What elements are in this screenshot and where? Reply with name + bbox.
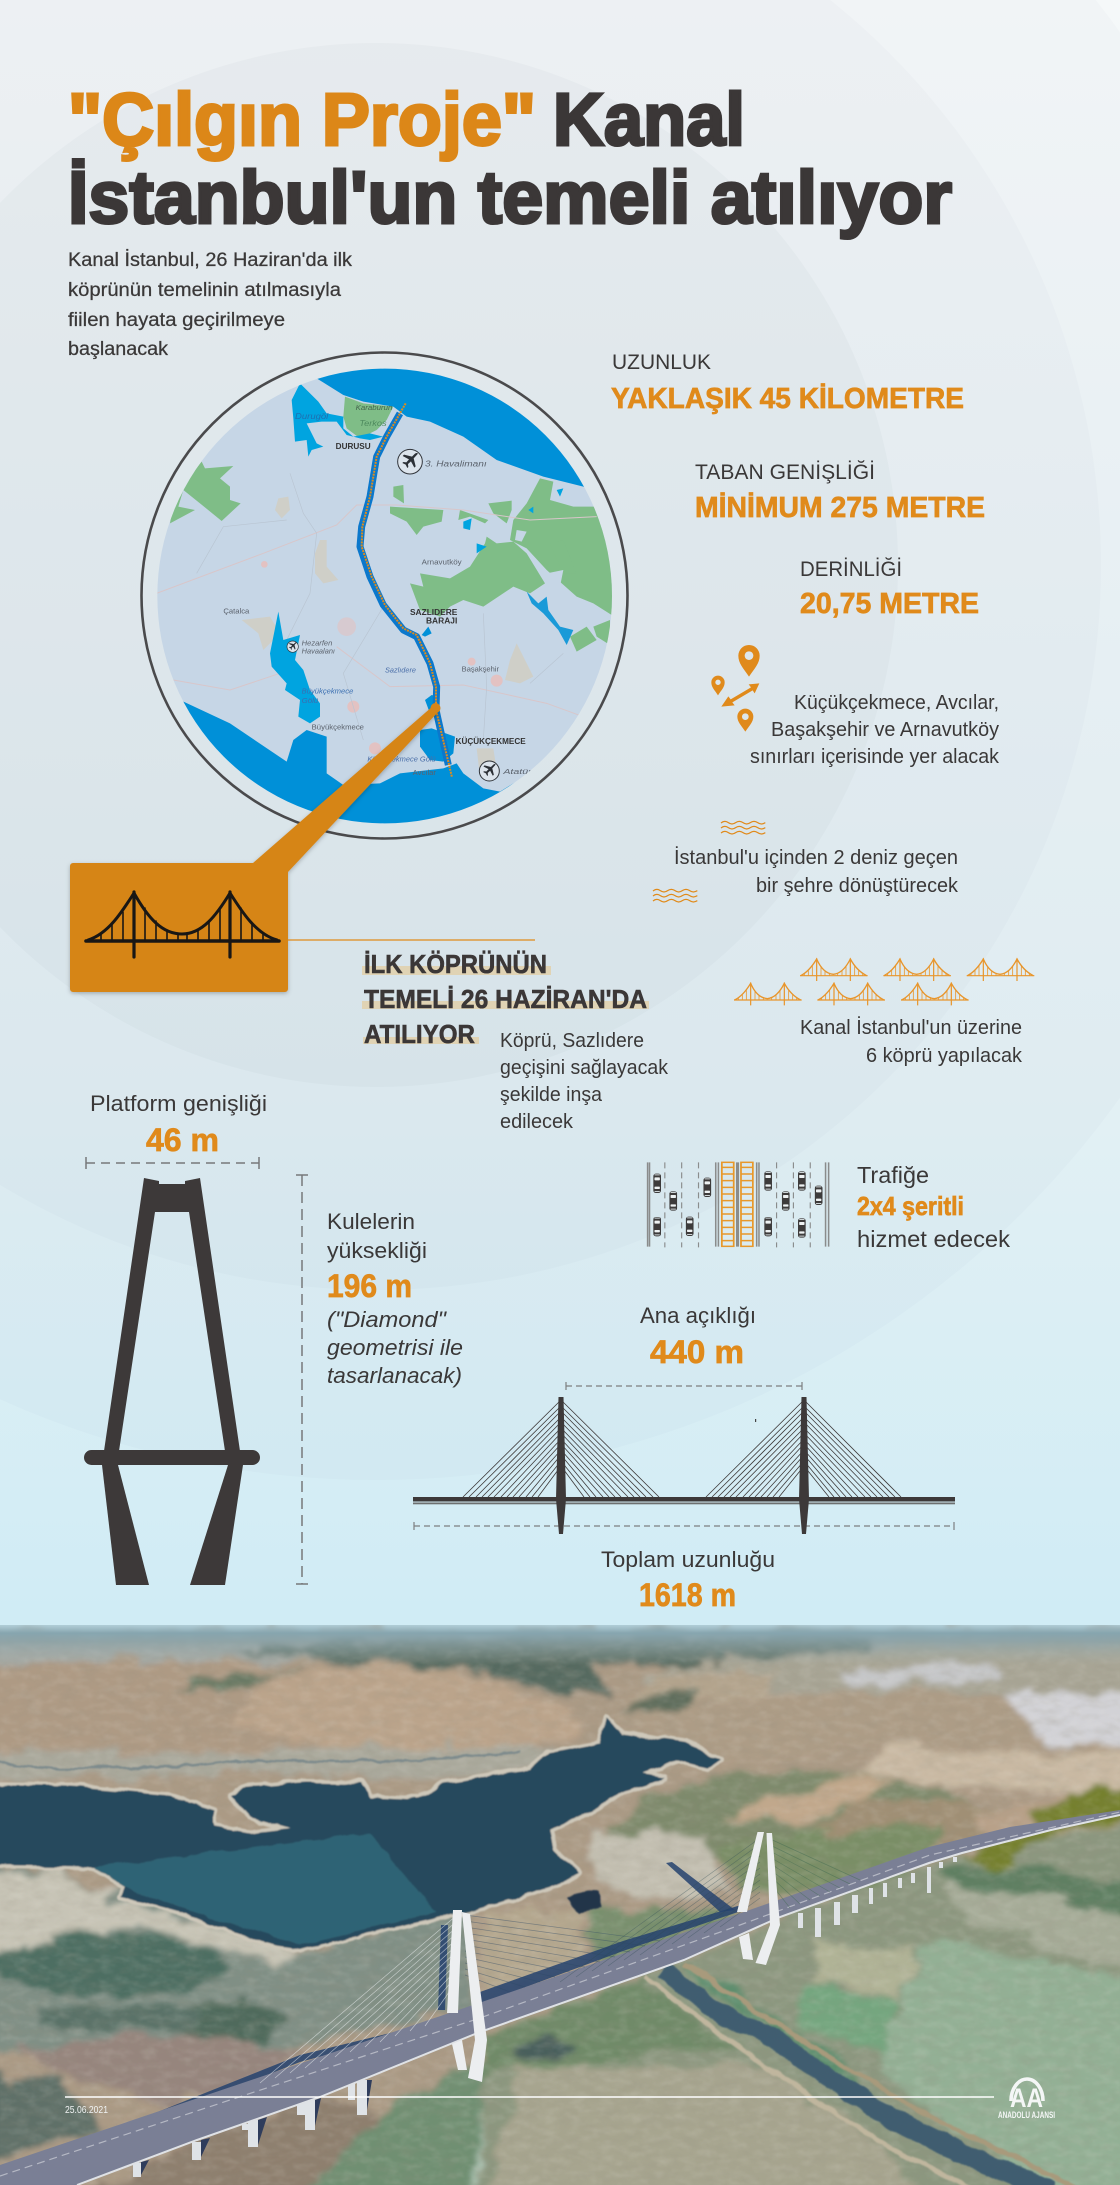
stat: length (611, 351, 964, 415)
logo: Anadolu Ajansı: AA (1010, 2083, 1043, 2113)
tower profile (84, 1178, 260, 1585)
total length label (601, 1547, 775, 1613)
intro text: Kanal İstanbul, 26 Haziran'da ilk (68, 250, 353, 271)
text: traffic lanes: 2x4 şeritli (857, 1191, 964, 1221)
map labels: Terkos (359, 418, 387, 428)
text: two seas: İstanbul'u içinden 2 deniz geçen (674, 846, 958, 869)
text: traffic lanes: Trafiğe (857, 1162, 929, 1188)
Küçükçekmece lake (420, 728, 455, 762)
stay cables (260, 1838, 860, 2083)
icon: location pins and arrow (711, 645, 760, 732)
tower height text: 196 m (327, 1268, 412, 1304)
tower height dimension (296, 1175, 308, 1584)
stat: base width: TABAN GENİŞLİĞİ (695, 461, 875, 484)
lakes (270, 383, 573, 723)
airport icons (287, 449, 499, 781)
map labels: Arnavutköy (422, 560, 462, 567)
bridge description: şekilde inşa (500, 1083, 603, 1106)
map labels: Avcılar (413, 770, 437, 777)
south sea (183, 702, 514, 824)
icon: suspension bridge (86, 892, 279, 957)
bridge deck (0, 1810, 1120, 2185)
main span label: 440 m (650, 1334, 744, 1370)
platform width label: Platform genişliği (90, 1091, 267, 1116)
icon: road with 2x4 lanes (648, 1162, 829, 1247)
heading: first bridge: İLK KÖPRÜNÜN (364, 949, 547, 979)
reservoir, river and pool (0, 1717, 1092, 2185)
canal route (360, 403, 452, 777)
stat: depth (800, 558, 979, 620)
south-east hillside (605, 1766, 968, 1861)
map circle (142, 352, 630, 840)
intro text: fiilen hayata geçirilmeye (68, 310, 285, 331)
map labels: Gölü (302, 698, 318, 705)
intro text: köprünün temelinin atılmasıyla (68, 280, 341, 301)
heading: first bridge: TEMELİ 26 HAZİRAN'DA (364, 984, 647, 1014)
text: two seas: bir şehre dönüştürecek (756, 874, 959, 897)
stat: depth: 20,75 METRE (800, 588, 979, 620)
text: two seas (674, 846, 959, 897)
title (68, 78, 952, 239)
text: six bridges: Kanal İstanbul'un üzerine (800, 1016, 1022, 1039)
tower height text: yüksekliği (327, 1238, 427, 1263)
map labels: KÜÇÜKÇEKMECE (456, 737, 526, 746)
settlement patches (242, 497, 533, 777)
icon: waves (653, 821, 765, 902)
cable-stayed bridge elevation (413, 1382, 955, 1534)
map labels: Atatür (502, 769, 533, 776)
footer line (65, 2096, 994, 2098)
lower left (0, 1860, 470, 2050)
intro text (68, 250, 353, 360)
intro text: başlanacak (68, 339, 169, 360)
text: districts: Başakşehir ve Arnavutköy (771, 718, 1000, 741)
north sea (317, 368, 584, 487)
map labels: Büyükçekmece (302, 688, 353, 695)
map labels: BARAJI (426, 617, 457, 626)
main span label: Ana açıklığı (640, 1303, 756, 1328)
map labels: Karaburun (356, 405, 392, 412)
main span label (640, 1303, 756, 1370)
connector line (288, 939, 535, 941)
bridge description (500, 1029, 669, 1133)
title: "Çılgın Proje" (68, 78, 536, 161)
bridge description: Köprü, Sazlıdere (500, 1029, 644, 1052)
pale gaps in the eastern forest (515, 530, 564, 582)
bridge description: edilecek (500, 1110, 574, 1133)
text: traffic lanes (857, 1162, 1011, 1252)
map labels: Küçükçekmece Gölü (367, 757, 436, 764)
map of Kanal İstanbul route (157, 368, 612, 824)
text: districts: Küçükçekmece, Avcılar, (794, 691, 999, 714)
tower height text: tasarlanacak) (327, 1363, 462, 1388)
bridge piers (133, 1857, 957, 2177)
platform width label (86, 1091, 267, 1169)
text: traffic lanes: hizmet edecek (857, 1226, 1011, 1252)
map labels: Sazlıdere (385, 668, 416, 675)
map labels: Başakşehir (462, 667, 500, 674)
stat: length: YAKLAŞIK 45 KİLOMETRE (611, 383, 964, 415)
text: districts (750, 691, 1000, 768)
below the deck, right (480, 1815, 1120, 2185)
stat: base width (695, 461, 985, 524)
stat: length: UZUNLUK (612, 351, 711, 374)
orange callout with bridge icon (70, 703, 440, 992)
map labels: SAZLIDERE (410, 608, 458, 617)
logo: Anadolu Ajansı (998, 2079, 1055, 2121)
terrain (0, 1630, 1120, 2185)
aerial photo of the bridge (0, 1610, 1120, 2185)
horizon haze (0, 1625, 1120, 1662)
heading: first bridge: ATILIYOR (364, 1019, 475, 1049)
map labels: Büyükçekmece (312, 724, 364, 731)
map labels (223, 405, 533, 777)
date: 25.06.2021 (65, 2105, 108, 2116)
land texture (8, 1660, 1119, 2060)
text: six bridges: 6 köprü yapılacak (866, 1044, 1023, 1067)
heading: first bridge (362, 949, 649, 1049)
icon: six bridges (734, 958, 1034, 1005)
total length label: 1618 m (639, 1577, 736, 1613)
roads (157, 505, 597, 717)
tower height text: geometrisi ile (327, 1335, 463, 1360)
tower height text (327, 1209, 463, 1388)
map labels: Çatalca (223, 609, 249, 616)
title: İstanbul'un temeli atılıyor (68, 156, 952, 239)
title: Kanal (553, 78, 745, 161)
logo: Anadolu Ajansı: ANADOLU AJANSI (998, 2110, 1055, 2121)
tower height text: Kulelerin (327, 1209, 415, 1234)
map labels: Durugöl (295, 411, 329, 421)
forests (170, 397, 617, 652)
stat: base width: MİNİMUM 275 METRE (695, 492, 985, 524)
text: six bridges (800, 1016, 1023, 1067)
platform width label: 46 m (146, 1122, 219, 1158)
shadows of the deck and towers (130, 1862, 741, 2127)
map labels: Havaalanı (302, 649, 335, 656)
stat: depth: DERİNLİĞİ (800, 558, 902, 581)
map labels: 3. Havalimanı (425, 459, 487, 469)
tower height text: ("Diamond" (327, 1307, 447, 1332)
map labels: DURUSU (336, 442, 371, 451)
text: districts: sınırları içerisinde yer alacak (750, 745, 1000, 768)
map labels: Hezarfen (302, 641, 332, 648)
bridge towers (447, 1832, 780, 2082)
total length label: Toplam uzunluğu (601, 1547, 775, 1572)
bridge description: geçişini sağlayacak (500, 1056, 669, 1079)
